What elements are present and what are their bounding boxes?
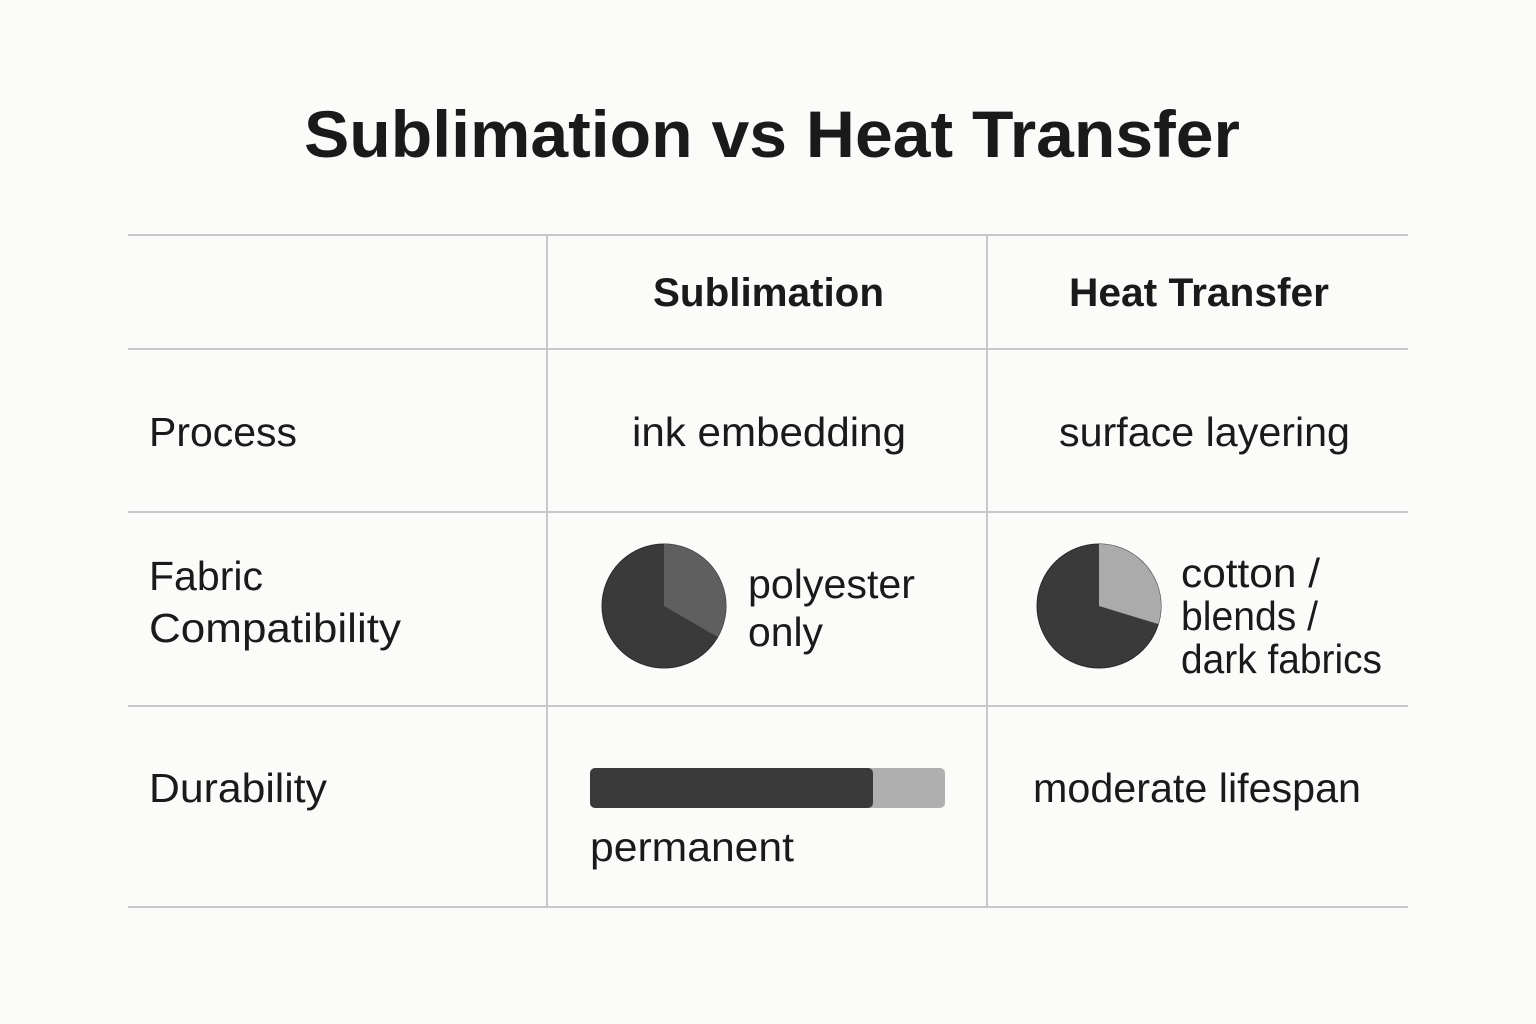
title: Sublimation vs Heat Transfer [304,97,1240,171]
row label: Durability: Durability [149,765,328,811]
heat transfer fabric text: cotton / [1181,550,1321,596]
heat transfer durability text: moderate lifespan [1033,765,1361,811]
sublimation process: ink embedding [632,409,906,455]
sublimation fabric text: only [748,609,823,655]
durability bar [590,768,945,808]
heat transfer fabric text [1181,550,1382,682]
heat transfer process: surface layering [1059,409,1350,455]
sublimation fabric text [748,561,915,655]
header: Heat Transfer: Heat Transfer [1069,271,1329,315]
heat transfer fabric text: dark fabrics [1181,636,1382,682]
pie chart: heat transfer [1037,544,1161,668]
sublimation fabric text: polyester [748,561,915,607]
header: Sublimation: Sublimation [653,271,884,315]
pie chart: sublimation [602,544,726,668]
row label: Process: Process [149,409,297,455]
row label: Fabric Compatibility [149,553,402,651]
row label: Fabric Compatibility: Fabric [149,553,263,599]
heat transfer fabric text: blends / [1181,593,1319,639]
row label: Fabric Compatibility: Compatibility [149,605,402,651]
sublimation durability text: permanent [590,824,795,870]
